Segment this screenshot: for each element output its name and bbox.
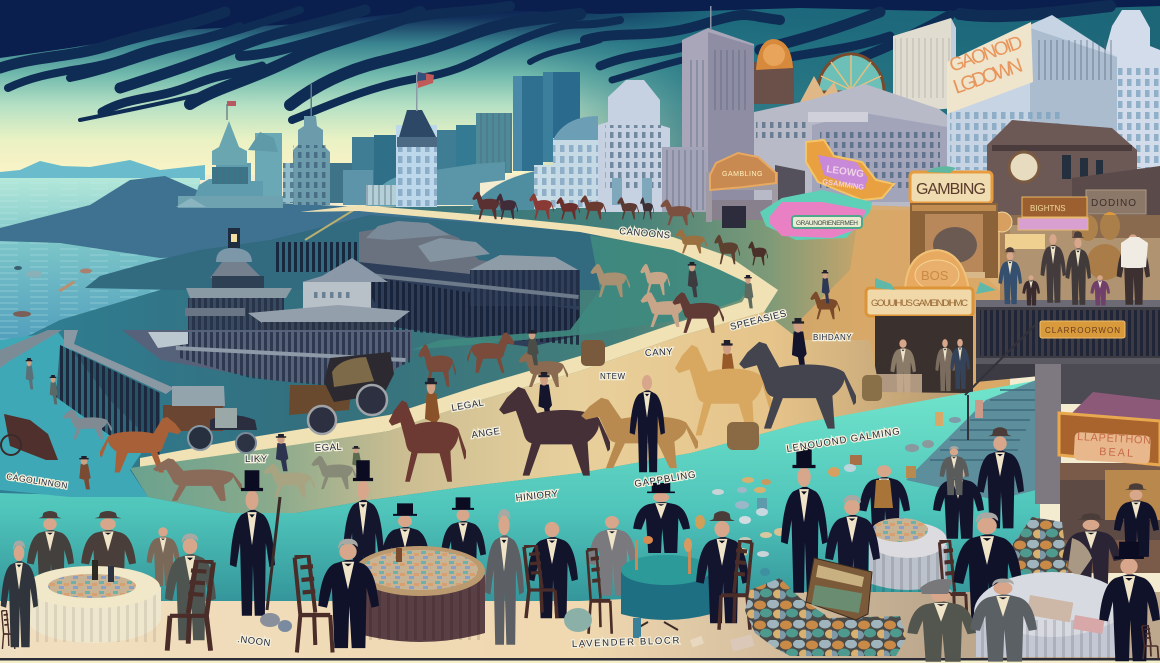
neon sign: pink and teal: GRAUNORIENERMEH — [796, 220, 858, 227]
road and era labels — [6, 226, 901, 650]
road and era labels: CAGOLINNON — [6, 471, 69, 491]
barrels on the road — [727, 375, 882, 450]
mint era band — [0, 380, 1040, 620]
balcony with railing: CLARROORWON — [1045, 326, 1120, 335]
road and era labels: CANY — [645, 347, 674, 359]
bottom border — [0, 658, 1160, 663]
wooden pavilion — [185, 228, 292, 352]
neon sign: leong gambling — [806, 140, 894, 200]
saloon sign: LLAPEITHON — [1077, 431, 1151, 447]
road and era labels: GAPPBLING — [634, 469, 697, 490]
neon sign: gambing — [910, 166, 992, 203]
road and era labels: HINIORY — [515, 489, 559, 504]
green hill with small horses — [411, 235, 752, 350]
theatre marquee: GAMBLING — [722, 171, 763, 178]
chip piles — [745, 517, 1068, 656]
saloon sign — [1059, 413, 1160, 465]
road and era labels: EGAL — [315, 442, 342, 454]
road and era labels: SPEEASIES — [729, 308, 788, 333]
road and era labels: LAVENDER BLOCR — [572, 635, 680, 650]
bay shallows at left — [0, 332, 150, 497]
saloon awning — [1069, 392, 1160, 422]
large horses and riders — [98, 318, 858, 501]
neon tower sign: LGDOWN — [950, 54, 1026, 99]
road and era labels: ANGE — [471, 426, 501, 441]
theatre marquee — [706, 153, 805, 228]
riverside hotel base — [122, 330, 411, 388]
road and era labels: CANOONS — [619, 226, 671, 241]
ornate gold marquee — [866, 250, 996, 316]
neon sign: pink and teal — [760, 190, 872, 240]
hall doorway crowd — [875, 316, 973, 396]
beige era band — [130, 312, 965, 513]
table group: bottom right — [907, 483, 1160, 662]
balcony with railing — [976, 300, 1160, 392]
neon sign: gambing: GAMBING — [916, 181, 986, 198]
vintage truck — [163, 386, 257, 453]
large classical bank building — [754, 84, 947, 210]
road and era labels: BIHDANY — [813, 333, 852, 342]
neon sign: leong gambling: LEOWG — [826, 164, 865, 180]
fence on the slope — [274, 242, 359, 272]
standing gentleman between horses — [630, 375, 665, 472]
road and era labels: .NOON — [237, 634, 271, 649]
casino storefront: DODINO — [1091, 198, 1137, 209]
rider line on the crest — [472, 192, 695, 225]
neon tower sign: GAONOID — [947, 32, 1025, 77]
carriage in shallows — [1, 358, 113, 489]
boats on the bay — [13, 266, 92, 317]
clapboard hotel — [248, 258, 410, 348]
road and era labels: LIKY — [245, 454, 268, 465]
sky — [0, 0, 1160, 215]
men on the balcony — [998, 231, 1150, 305]
horse drawn carriage — [289, 352, 394, 434]
floor — [0, 592, 1160, 660]
left boardwalks and pier — [0, 330, 174, 455]
gentleman with cane — [230, 470, 292, 632]
storm clouds — [0, 0, 1160, 120]
table group: teal table — [587, 483, 752, 638]
long stilted hotel — [359, 221, 580, 347]
ornate gold marquee: BOS — [921, 268, 949, 283]
casino storefront: BIGHTNS — [1030, 204, 1066, 213]
mid ground slope — [0, 195, 1010, 520]
ornate gold marquee: GOUUIHUS GAMEINDIHMC — [871, 298, 968, 309]
neon tower sign — [947, 32, 1026, 99]
barrel — [581, 340, 605, 366]
grey skyscraper — [662, 6, 754, 212]
classical white buildings — [553, 80, 670, 212]
floating chips — [695, 400, 983, 576]
table group: brown table — [295, 460, 578, 652]
road and era labels: LEGAL — [451, 397, 485, 414]
casino storefront — [992, 166, 1160, 300]
scattered cards — [564, 608, 754, 652]
table group: left, cream table — [1, 511, 216, 651]
distant mountains — [0, 160, 205, 180]
road and era labels: LENOUOND GALMING — [786, 426, 901, 455]
coastal headland — [0, 176, 600, 290]
table group: chest and grey table — [781, 427, 1024, 620]
warm downtown glow — [780, 205, 1010, 425]
stone stairs — [906, 325, 1040, 500]
white tower — [893, 18, 956, 113]
gambling hall entrance — [910, 203, 998, 278]
white clock tower with flag — [396, 71, 437, 207]
sea — [0, 178, 200, 348]
neon sign: leong gambling: GSAMMING — [822, 177, 865, 192]
road and era labels: NTEW — [600, 372, 626, 381]
cream road curving through the hill — [140, 205, 778, 470]
horses in the mid field — [418, 229, 841, 387]
saloon wooden wall — [1035, 364, 1160, 573]
capitol building — [176, 101, 283, 208]
ornate clock building — [987, 120, 1137, 225]
distant city skyline — [248, 72, 580, 210]
carnival dome and ferris wheel — [754, 39, 884, 108]
right office tower with sign — [947, 10, 1160, 177]
saloon sign: BEAL — [1099, 446, 1133, 460]
